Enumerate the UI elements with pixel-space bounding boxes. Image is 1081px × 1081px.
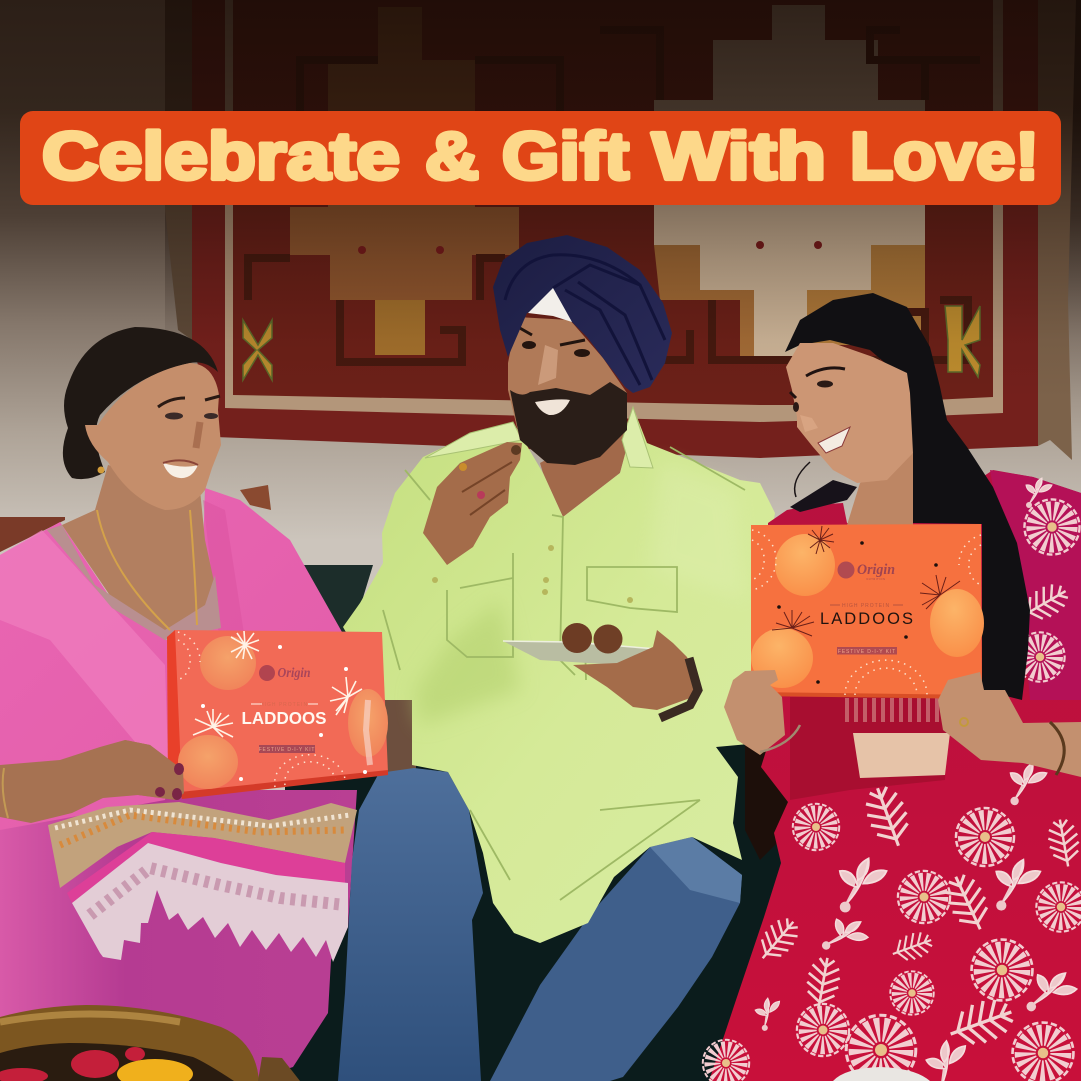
hooked meander lines xyxy=(235,30,980,362)
eyes xyxy=(518,327,590,357)
pockets and seams xyxy=(383,447,745,900)
title text xyxy=(42,120,1039,194)
left stepped medallion xyxy=(290,7,519,355)
brass bowl xyxy=(0,1005,300,1081)
plate xyxy=(503,641,670,665)
shirt buttons xyxy=(432,545,633,603)
watch xyxy=(660,658,698,718)
turban xyxy=(493,235,672,393)
jeans right leg xyxy=(490,837,742,1081)
face features xyxy=(790,368,850,453)
wall hanging rug xyxy=(165,0,1081,460)
dupatta xyxy=(0,488,342,830)
flowers xyxy=(0,1047,193,1081)
person: right woman xyxy=(703,293,1081,1081)
gift box: left xyxy=(167,630,388,799)
white under-turban xyxy=(528,288,572,322)
neck xyxy=(847,453,913,525)
mouth xyxy=(535,399,570,415)
collars xyxy=(425,407,653,468)
right stepped medallion xyxy=(654,5,925,357)
face features xyxy=(98,396,220,478)
gift box: left: LADDOOS xyxy=(242,708,326,728)
hair and bun xyxy=(63,327,218,479)
sleeve and waist shade xyxy=(790,697,950,800)
title text: Love! xyxy=(850,120,1039,194)
gift box: right: FESTIVE D-I-Y KIT xyxy=(838,649,896,655)
gift box: left: FESTIVE D-I-Y KIT xyxy=(259,747,315,753)
person: man xyxy=(338,235,775,1081)
hand at mouth xyxy=(423,442,522,565)
sparkle bursts xyxy=(772,526,960,636)
small medallion stars xyxy=(358,241,822,254)
gift box: right: NUTRITION xyxy=(866,578,886,581)
face xyxy=(786,343,913,483)
white petticoat xyxy=(833,1067,930,1081)
left woman fingers over box xyxy=(125,740,184,800)
gold embroidered band xyxy=(48,802,357,888)
box text: HIGH PROTEIN xyxy=(842,603,890,609)
jeans left leg xyxy=(338,768,483,1081)
box logo xyxy=(838,562,854,578)
sparkle bursts xyxy=(193,631,362,737)
person: left woman xyxy=(0,327,357,1081)
laddoos xyxy=(562,623,592,653)
neck and chest xyxy=(62,465,218,640)
title text: With xyxy=(652,120,826,194)
title text: Celebrate xyxy=(42,120,400,194)
shirt xyxy=(343,407,775,943)
dress top right magenta xyxy=(990,470,1081,700)
gift box: right: LADDOOS xyxy=(820,610,913,628)
box logo xyxy=(259,665,275,681)
brown arm xyxy=(0,740,184,823)
box text: HIGH PROTEIN xyxy=(260,702,308,708)
earring loop xyxy=(795,462,810,497)
face xyxy=(508,317,627,463)
title text: Gift xyxy=(502,120,629,194)
title text: & xyxy=(425,120,479,194)
gift box: right xyxy=(751,524,984,699)
sofa xyxy=(0,485,800,1081)
dotted arcs xyxy=(178,632,345,787)
satin trim xyxy=(67,832,345,903)
butterfly motifs xyxy=(243,320,272,380)
decorative balls xyxy=(751,534,984,688)
floral print xyxy=(703,478,1081,1081)
gift box: left: Origin xyxy=(278,666,311,681)
lace border xyxy=(72,843,348,962)
pink lower skirt xyxy=(0,790,357,1081)
gift box: right: Origin xyxy=(857,562,895,578)
title banner xyxy=(20,111,1061,205)
dotted arcs xyxy=(752,530,981,695)
shirt shadows and highlights xyxy=(415,600,520,725)
dress xyxy=(709,470,1081,1081)
embroidered neckline xyxy=(47,525,221,640)
dark sofa seat behind legs xyxy=(285,695,800,1081)
plate hand xyxy=(573,630,698,710)
face xyxy=(85,363,221,510)
yoke embroidery xyxy=(853,733,950,778)
hair xyxy=(785,293,1030,700)
hands over box xyxy=(724,670,1081,777)
decorative balls xyxy=(178,636,388,789)
gold necklace xyxy=(97,510,197,630)
neck xyxy=(540,417,627,517)
beard xyxy=(510,382,627,465)
